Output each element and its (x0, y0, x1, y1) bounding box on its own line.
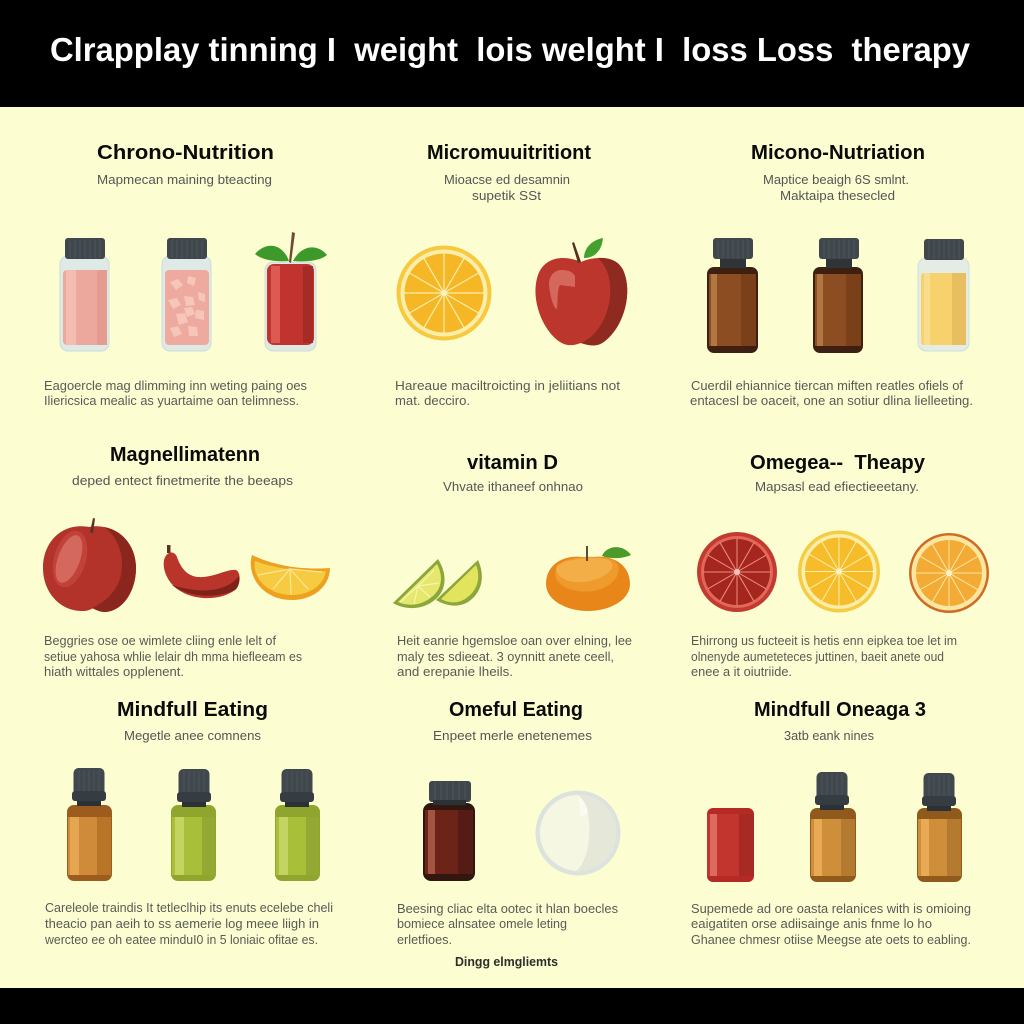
panel: mindful omega 3 (691, 699, 971, 947)
header band (0, 0, 1024, 107)
subtitle: Megetle anee comnens (124, 729, 261, 743)
body text: setiue yahosa whlie lelair dh mma hiefleeam es (44, 650, 302, 664)
panel: omeful eating (397, 699, 620, 969)
subtitle: Mapsasl ead efiectieeetany. (755, 480, 919, 494)
panel: micronutrition (395, 142, 627, 408)
caption: Dingg elmgliemts (455, 955, 558, 969)
heading: Magnellimatenn (110, 444, 260, 466)
body text: Beggries ose oe wimlete cliing enle lelt of (44, 634, 277, 648)
panel: omega therapy (691, 452, 989, 679)
icon: blood orange slice (697, 532, 777, 612)
icon: lemon slice (798, 530, 880, 612)
icon: plum (43, 518, 136, 612)
icon: green dropper bottle (275, 769, 320, 881)
body text: bomiece alnsatee omele leting (397, 917, 567, 931)
body text: mat. decciro. (395, 394, 470, 408)
heading: Chrono-Nutrition (97, 142, 274, 164)
body text (691, 634, 957, 679)
heading: vitamin D (467, 452, 558, 474)
body text (395, 379, 621, 408)
subtitle: deped entect finetmerite the beeaps (72, 474, 293, 488)
subtitle: Vhvate ithaneef onhnao (443, 480, 583, 494)
body text: Eagoercle mag dlimming inn weting paing oes (44, 379, 307, 393)
body text: entacesl be oaceit, one an sotiur dlina lielleeting. (690, 394, 973, 408)
icon: pink flakes bottle (162, 238, 211, 351)
icon: white sphere (536, 790, 620, 876)
panel: vitamin d (393, 452, 632, 679)
icon: orange slice (396, 246, 492, 340)
subtitle (763, 173, 909, 203)
heading: Mindfull Eating (117, 699, 268, 721)
icon: green dropper bottle (171, 769, 216, 881)
icon: dark red bottle (423, 781, 475, 881)
icon: red block bottle (707, 808, 754, 882)
icon: brown bottle (707, 238, 758, 353)
icon: lemon wedge (251, 555, 330, 600)
subtitle: Maktaipa thesecled (780, 189, 895, 203)
body text (397, 634, 632, 679)
body text: Heit eanrie hgemsloe oan over elning, lee (397, 634, 632, 648)
subtitle: Mapmecan maining bteacting (97, 173, 272, 187)
body text (44, 901, 333, 947)
subtitle (444, 173, 570, 203)
subtitle: Enpeet merle enetenemes (433, 729, 592, 743)
icon: orange fruit (546, 546, 631, 611)
body text (44, 379, 307, 408)
body text: Iliericsica mealic as yuartaime oan telimness. (44, 394, 299, 408)
icon: brown bottle (813, 238, 863, 353)
footer band (0, 988, 1024, 1024)
body text: Ehirrong us fucteeit is hetis enn eipkea toe let im (691, 634, 957, 648)
subtitle: Maptice beaigh 6S smlnt. (763, 173, 909, 187)
panel: mindful eating (44, 699, 333, 947)
body text: maly tes sdieeat. 3 oynnitt anete ceell, (397, 650, 614, 664)
icon: red bottle with leaves (255, 232, 327, 351)
body text: Ghanee chmesr otiise Meegse ate oets to eabling. (691, 933, 971, 947)
panel: magnesium (43, 444, 330, 679)
body text: eaigatiten orse adiisainge anis fnme lo ho (691, 917, 932, 931)
body text (44, 634, 302, 679)
heading: Micono-Nutriation (751, 142, 925, 164)
panel: micono-nutriation (690, 142, 973, 408)
body text: enee a it oiutriide. (691, 665, 792, 679)
body text: olnenyde aumeteteces juttinen, baeit anete oud (691, 650, 944, 664)
body text: and erepanie lheils. (397, 665, 513, 679)
icon: amber dropper bottle (810, 772, 856, 882)
body text: theacio pan aeih to ss aemerie log meee liigh in (45, 917, 319, 931)
icon: yellow clear bottle (918, 239, 969, 351)
body text: Hareaue maciltroicting in jeliitians not (395, 379, 621, 393)
heading: Omeful Eating (449, 699, 583, 721)
icon: chili (164, 545, 240, 598)
icon: amber dropper bottle (917, 773, 962, 882)
icon: orange slice (909, 533, 989, 613)
panel: chrono-nutrition (44, 142, 327, 408)
icon: red apple (535, 238, 627, 345)
heading: Micromuuitritiont (427, 142, 591, 164)
body text (690, 379, 973, 408)
body text (397, 902, 618, 947)
body text: Careleole traindis It tetleclhip its enuts ecelebe cheli (45, 901, 333, 915)
icon: pink bottle (60, 238, 109, 351)
subtitle: Mioacse ed desamnin (444, 173, 570, 187)
icon: lime wedges (393, 559, 482, 608)
icon: amber dropper bottle (67, 768, 112, 881)
title: Clrapplay tinning I weight lois welght I loss Loss therapy (50, 31, 971, 68)
heading: Omegea-- Theapy (750, 452, 926, 474)
body text: Supemede ad ore oasta relanices with is omioing (691, 902, 971, 916)
body text (691, 902, 971, 947)
body text: wercteo ee oh eatee minduI0 in 5 loniaic ofitae es. (44, 933, 318, 947)
subtitle: 3atb eank nines (784, 729, 874, 743)
subtitle: supetik SSt (472, 189, 542, 203)
heading: Mindfull Oneaga 3 (754, 699, 926, 721)
body text: Beesing cliac elta ootec it hlan boecles (397, 902, 618, 916)
body text: erletfioes. (397, 933, 452, 947)
body text: hiath wittales opplenent. (44, 665, 184, 679)
body text: Cuerdil ehiannice tiercan miften reatles ofiels of (691, 379, 964, 393)
